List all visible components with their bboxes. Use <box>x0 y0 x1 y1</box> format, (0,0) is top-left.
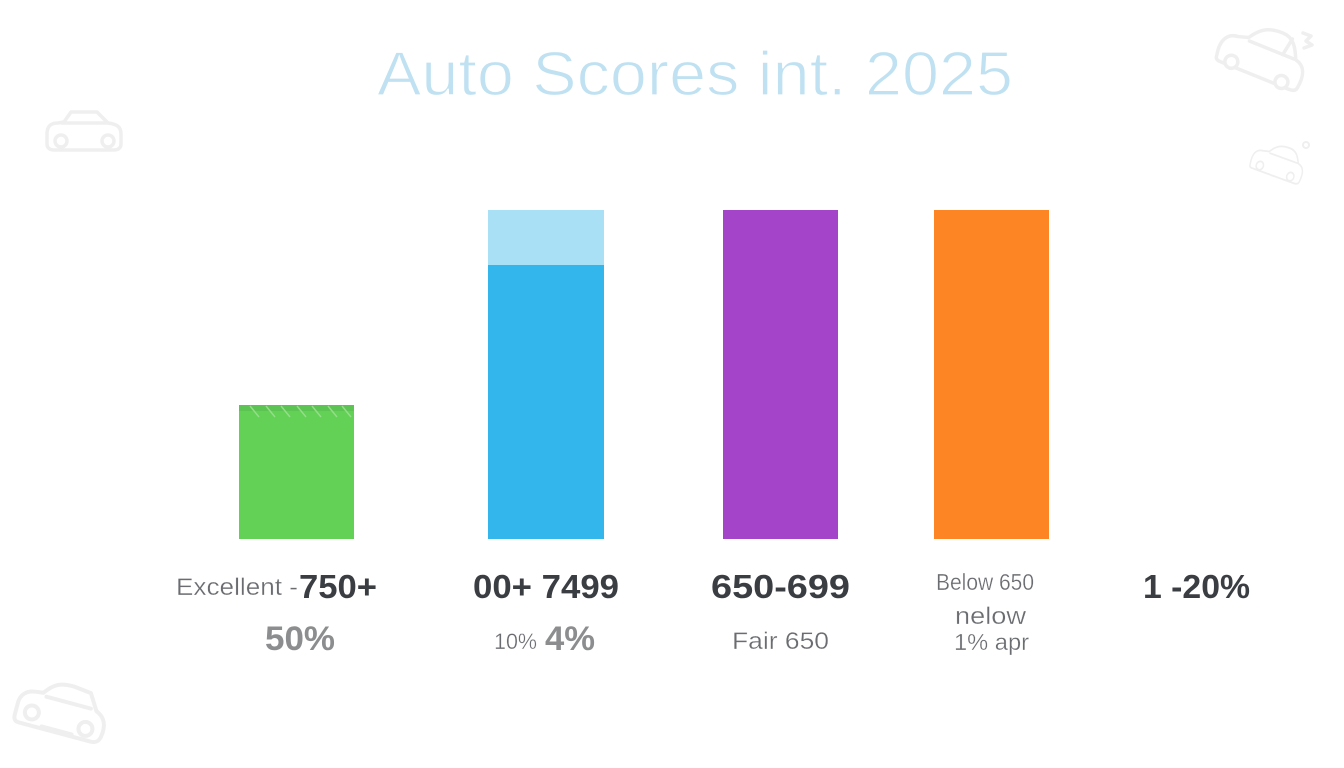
label: below 650: Below 650 <box>936 569 1034 595</box>
bar: fair purple <box>723 210 838 539</box>
bar: good blue <box>488 210 604 539</box>
icon: sparkle top right <box>1303 33 1312 48</box>
value: 1-20%: 1 -20% <box>1143 568 1250 605</box>
label: excellent 750+: 750+ <box>299 568 377 605</box>
label: Fair 650: Fair 650 <box>732 628 829 655</box>
icon: car top right <box>1213 13 1315 95</box>
value: 10% 4%: 10% <box>494 629 537 654</box>
label: 650-699: 650-699 <box>711 568 850 605</box>
icon: small circle near car <box>1303 142 1309 148</box>
label: excellent 750+: Excellent - <box>176 574 298 601</box>
title: Auto Scores int. 2025 <box>377 40 1013 109</box>
label: 00+ 7499: 00+ 7499 <box>473 568 619 605</box>
bar: poor orange <box>934 210 1049 539</box>
label: nelow: nelow <box>955 603 1027 630</box>
icon: car upper left <box>47 112 121 150</box>
value: 10% 4%: 4% <box>545 620 595 658</box>
icon: car upper right small <box>1249 137 1309 185</box>
label: 1% apr: 1% apr <box>954 629 1029 655</box>
bar: excellent green <box>239 405 354 539</box>
label: excellent 750+ <box>176 568 377 605</box>
value: 50%: 50% <box>265 620 335 658</box>
icon: car bottom left <box>13 674 112 744</box>
value: 10% 4% <box>494 620 595 658</box>
